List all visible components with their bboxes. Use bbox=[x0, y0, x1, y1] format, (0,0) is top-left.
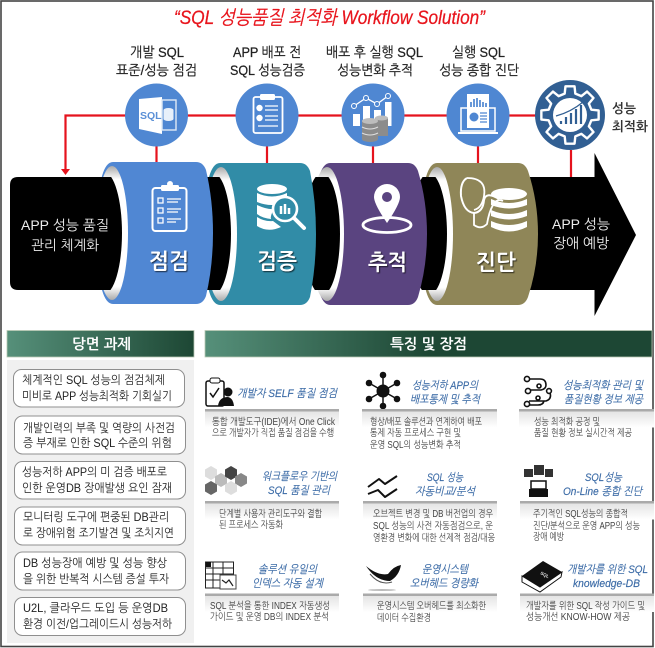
black start block: APP 성능 품질 관리 체계화: APP 성능 품질 bbox=[21, 217, 109, 233]
feature: 개발자 SELF 품질 점검 bbox=[205, 378, 339, 439]
feature: 성능저하 APP의 배포통제 및 추적: 배포통제 및 추적 bbox=[410, 393, 481, 406]
feature: 솔루션 유일의 인덱스 자동 설계: 가이드 및 운영 DB의 INDEX 분석 bbox=[210, 611, 329, 623]
icon: inspection clipboard bbox=[152, 181, 186, 231]
feature: 워크플로우 기반의 SQL 품질 관리: SQL 품질 관리 bbox=[268, 484, 331, 497]
cylinder: 점검: 점검 bbox=[149, 249, 189, 274]
issue 6: U2L, 클라우드 도입 등 운영DB bbox=[23, 601, 168, 615]
process arrow: APP 성능 장애 예방: APP 성능 bbox=[552, 216, 610, 232]
step label: 개발 SQL: 개발 SQL bbox=[130, 44, 184, 60]
issue 6: 환경 이전/업그레이드시 성능저하 bbox=[23, 617, 173, 631]
label: 성능 최적화: 최적화 bbox=[612, 119, 649, 134]
feature: 성능최적화 관리 및 품질현황 정보 제공 bbox=[519, 376, 654, 439]
feature: 운영시스템 오버헤드 경량화 bbox=[363, 563, 497, 624]
icon: node paths bbox=[524, 376, 551, 407]
cylinder: 추적: 추적 bbox=[368, 250, 407, 275]
issue 1 bbox=[14, 370, 184, 407]
feature: 성능저하 APP의 배포통제 및 추적: 통제 자동 프로세스 구현 및 bbox=[370, 427, 461, 439]
step label: 개발 SQL bbox=[116, 44, 197, 78]
feature: 솔루션 유일의 인덱스 자동 설계: 솔루션 유일의 bbox=[258, 563, 318, 576]
step label: 개발 SQL: 표준/성능 점검 bbox=[116, 62, 197, 78]
icon: SQL monitor bbox=[524, 465, 553, 497]
red flow connector lines bbox=[61, 116, 571, 177]
black start block: APP 성능 품질 관리 체계화: 관리 체계화 bbox=[31, 237, 100, 253]
process arrow: APP 성능 장애 예방: 장애 예방 bbox=[553, 235, 609, 251]
heading: 특징 및 장점 bbox=[205, 330, 652, 357]
step label: 실행 SQL: 성능 종합 진단 bbox=[439, 62, 519, 78]
feature: 성능최적화 관리 및 품질현황 정보 제공: 품질현황 정보 제공 bbox=[564, 393, 644, 406]
issue 4 bbox=[14, 507, 186, 545]
issue 2: 개발인력의 부족 및 역량의 사전검 bbox=[23, 421, 175, 435]
cylinder: 검증 bbox=[195, 163, 316, 305]
step label: 실행 SQL bbox=[439, 44, 519, 78]
feature: 운영시스템 오버헤드 경량화: 운영시스템 오버헤드를 최소화한 bbox=[377, 600, 486, 612]
icon circle: report on laptop bbox=[446, 84, 510, 146]
icon circle: chart and database bbox=[342, 84, 404, 146]
feature: 솔루션 유일의 인덱스 자동 설계: 인덱스 자동 설계 bbox=[252, 577, 324, 590]
issue 2 bbox=[14, 416, 186, 454]
feature: SQL성능 On-Line 종합 진단: 주기적인 SQL성능의 종합적 bbox=[533, 508, 628, 520]
cylinder: 진단: 진단 bbox=[476, 250, 516, 275]
icon: feather bbox=[366, 565, 401, 591]
feature: 개발자를 위한 SQL knowledge-DB: 개발자를 위한 SQL bbox=[567, 563, 648, 576]
feature: 개발자를 위한 SQL knowledge-DB: knowledge-DB bbox=[573, 578, 640, 590]
feature: 성능최적화 관리 및 품질현황 정보 제공: 품질 현황 정보 실시간적 제공 bbox=[534, 427, 632, 439]
issue 4: 모니터링 도구에 편중된 DB관리 bbox=[23, 510, 169, 524]
issue 1: 체계적인 SQL 성능의 점검체제 bbox=[22, 373, 165, 387]
feature: 성능저하 APP의 배포통제 및 추적 bbox=[362, 372, 497, 451]
black start block: APP 성능 품질 관리 체계화 bbox=[10, 177, 109, 290]
feature: 성능최적화 관리 및 품질현황 정보 제공: 성능 최적화 공정 및 bbox=[534, 416, 600, 428]
feature: 개발자 SELF 품질 점검: 통합 개발도구(IDE)에서 One Click bbox=[212, 416, 336, 428]
process arrow: APP 성능 장애 예방 bbox=[530, 153, 636, 316]
icon: location pin bbox=[363, 184, 411, 232]
cylinder: 추적 bbox=[304, 163, 427, 305]
issue 5: DB 성능장애 예방 및 성능 향상 bbox=[23, 556, 167, 570]
icon: clipboard and person bbox=[206, 378, 234, 406]
feature: SQL 성능 자동비교/분석: 영환경 변화에 대한 선제적 점검/대응 bbox=[373, 532, 495, 544]
label: 성능 최적화 bbox=[612, 101, 649, 134]
issue 1: 미비로 APP 성능최적화 기회실기 bbox=[22, 389, 172, 403]
cylinder: 검증: 검증 bbox=[257, 249, 297, 274]
icon: network star bbox=[366, 372, 400, 409]
panel: 당면 과제 bbox=[7, 330, 194, 643]
feature: 개발자를 위한 SQL knowledge-DB: 성능개선 KNOW-HOW 제공 bbox=[526, 611, 631, 623]
feature: 운영시스템 오버헤드 경량화: 데이터 수집환경 bbox=[377, 612, 431, 624]
feature: 워크플로우 기반의 SQL 품질 관리: 워크플로우 기반의 bbox=[262, 470, 338, 483]
feature: 성능저하 APP의 배포통제 및 추적: 운영 SQL의 성능변화 추적 bbox=[370, 439, 461, 451]
feature: 성능저하 APP의 배포통제 및 추적: 성능저하 APP의 bbox=[412, 379, 479, 392]
icon circle: SQL file bbox=[125, 84, 188, 146]
heading: 당면 과제 bbox=[7, 330, 194, 357]
step label: APP 배포 전: SQL 성능검증 bbox=[230, 62, 305, 78]
issue 5 bbox=[14, 552, 186, 590]
feature: 개발자 SELF 품질 점검: 개발자 SELF 품질 점검 bbox=[237, 387, 339, 400]
icon: zigzag lines bbox=[368, 476, 397, 497]
feature: SQL성능 On-Line 종합 진단: On-Line 종합 진단 bbox=[563, 485, 644, 498]
title: “SQL 성능품질 최적화 Workflow Solution” bbox=[174, 8, 487, 29]
icon circle: performance gear bbox=[535, 80, 605, 150]
feature: SQL 성능 자동비교/분석: 자동비교/분석 bbox=[415, 485, 477, 498]
issue 3: 인한 운영DB 장애발생 요인 잠재 bbox=[22, 481, 172, 495]
icon: hexagons bbox=[205, 466, 247, 495]
feature: 운영시스템 오버헤드 경량화: 오버헤드 경량화 bbox=[410, 577, 479, 590]
icon: book: SQL bbox=[540, 570, 550, 579]
issue 2: 증 부재로 인한 SQL 수준의 위험 bbox=[23, 436, 172, 450]
icon: database and magnifier bbox=[257, 184, 304, 230]
feature: 성능최적화 관리 및 품질현황 정보 제공: 성능최적화 관리 및 bbox=[563, 379, 644, 392]
step label: APP 배포 전: APP 배포 전 bbox=[233, 44, 301, 60]
feature: 솔루션 유일의 인덱스 자동 설계 bbox=[205, 562, 339, 623]
feature: 개발자 SELF 품질 점검: 으로 개발자가 직접 품질 점검을 수행 bbox=[212, 427, 334, 439]
cylinder: 진단 bbox=[411, 163, 538, 305]
issue 3: 성능저하 APP의 미 검증 배포로 bbox=[22, 465, 167, 479]
step label: APP 배포 전 bbox=[230, 44, 305, 78]
icon: index table bbox=[206, 562, 236, 589]
feature: SQL 성능 자동비교/분석: 오브젝트 변경 및 DB 버전업의 경우 bbox=[373, 508, 493, 520]
feature: 솔루션 유일의 인덱스 자동 설계: SQL 분석을 통한 INDEX 자동생성 bbox=[210, 600, 330, 612]
step label: 배포 후 실행 SQL: 배포 후 실행 SQL bbox=[326, 44, 423, 60]
feature: 운영시스템 오버헤드 경량화: 운영시스템 bbox=[422, 563, 469, 576]
feature: 개발자를 위한 SQL knowledge-DB bbox=[520, 561, 654, 623]
feature: SQL 성능 자동비교/분석: SQL 성능의 사전 자동점검으로, 운 bbox=[373, 520, 493, 532]
feature: SQL 성능 자동비교/분석 bbox=[363, 471, 497, 544]
feature: SQL성능 On-Line 종합 진단 bbox=[520, 465, 654, 543]
feature: 워크플로우 기반의 SQL 품질 관리 bbox=[205, 466, 339, 531]
icon: stethoscope and database bbox=[461, 178, 527, 232]
step label: 배포 후 실행 SQL bbox=[326, 44, 423, 78]
cylinder: 점검 bbox=[102, 162, 213, 304]
heading: 특징 및 장점: 특징 및 장점 bbox=[390, 336, 467, 353]
feature: 워크플로우 기반의 SQL 품질 관리: 된 프로세스 자동화 bbox=[219, 519, 283, 531]
heading: 당면 과제: 당면 과제 bbox=[72, 336, 131, 353]
issue 6 bbox=[14, 598, 186, 636]
step label: 실행 SQL: 실행 SQL bbox=[452, 44, 505, 60]
feature: 워크플로우 기반의 SQL 품질 관리: 단계별 사용자 관리도구와 결합 bbox=[219, 508, 322, 520]
label: 성능 최적화: 성능 bbox=[612, 101, 636, 116]
issue 5: 을 위한 반복적 시스템 증설 투자 bbox=[23, 572, 169, 586]
icon circle: SQL file: SQL bbox=[140, 110, 162, 122]
issue 4: 로 장애위험 조기발견 및 조치지연 bbox=[23, 526, 174, 540]
icon circle: checklist clipboard bbox=[236, 84, 298, 146]
feature: 성능저하 APP의 배포통제 및 추적: 형상/배포 솔루션과 연계하여 배포 bbox=[370, 416, 482, 428]
feature: SQL성능 On-Line 종합 진단: 장애 예방 bbox=[533, 531, 564, 543]
issue 3 bbox=[14, 462, 186, 499]
step label: 배포 후 실행 SQL: 성능변화 추적 bbox=[337, 62, 413, 78]
feature: SQL 성능 자동비교/분석: SQL 성능 bbox=[427, 471, 464, 484]
feature: SQL성능 On-Line 종합 진단: SQL성능 bbox=[585, 471, 623, 484]
